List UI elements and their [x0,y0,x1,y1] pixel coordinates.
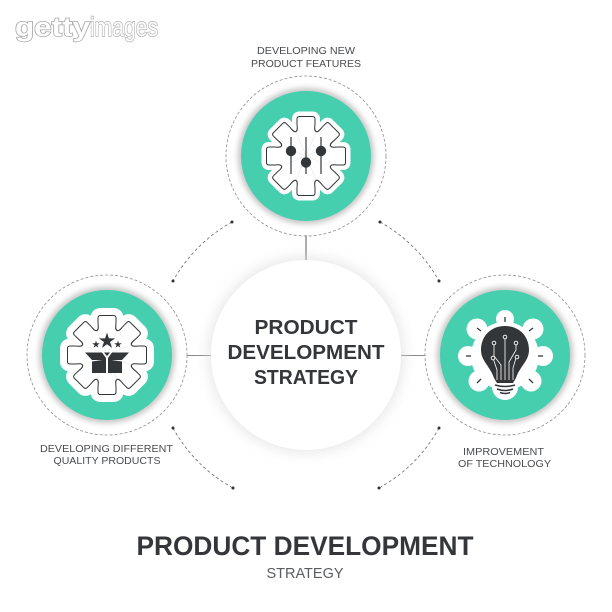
connector: left [187,354,212,356]
panel: top node [226,76,386,236]
icon: gear with open box and stars [68,316,146,394]
label: developing new product features: PRODUCT FEATURES [251,58,361,70]
panel: right node [425,275,585,435]
label: developing new product features [251,45,361,70]
icon: light bulb with circuit [458,310,553,400]
central circle title: STRATEGY [254,367,359,389]
label: improvement of technology: OF TECHNOLOGY [458,458,551,470]
label: developing different quality products [40,443,174,467]
connector: top [305,235,307,260]
central circle title: DEVELOPMENT [228,342,384,364]
icon: gear with sliders [267,117,345,195]
watermark logo [15,12,158,42]
label: improvement of technology: IMPROVEMENT [463,446,545,458]
central circle title [228,317,384,389]
central circle title: PRODUCT [254,317,358,339]
connector: right [401,354,425,356]
arc arrow: top left [172,220,234,282]
arc arrow: bottom right [378,426,440,490]
panel: left node [27,275,187,435]
central circle [211,260,401,450]
label: developing different quality products: DEVELOPING DIFFERENT [40,443,174,455]
label: improvement of technology [458,446,551,470]
watermark logo: images [90,12,158,42]
arc arrow: top right [378,220,440,282]
main title: PRODUCT DEVELOPMENT [136,531,474,561]
subtitle: STRATEGY [266,565,344,582]
label: developing new product features: DEVELOPING NEW [257,45,355,57]
label: developing different quality products: QUALITY PRODUCTS [54,455,160,467]
arc arrow: bottom left [172,426,234,490]
watermark logo: getty [15,12,90,42]
